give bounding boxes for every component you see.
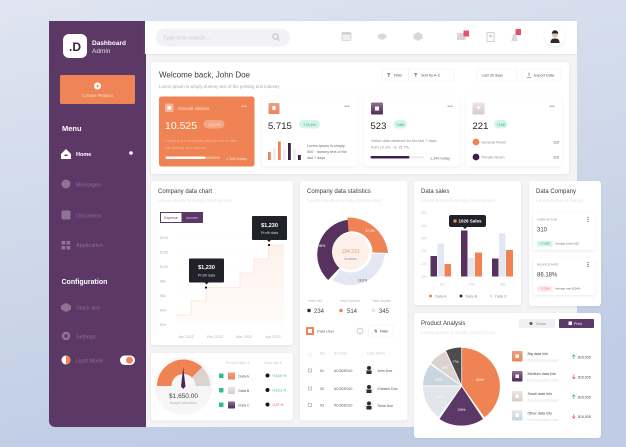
panel: product analysis bbox=[414, 313, 601, 438]
legend: Data B bbox=[466, 294, 478, 298]
donut chart: 194,231 bbox=[341, 249, 360, 255]
table: users: #CODE010 bbox=[334, 404, 352, 408]
card: overall visitors: the printing and industry bbox=[166, 146, 206, 150]
card: user active: 310 bbox=[537, 228, 548, 234]
card: overall visitors: Lorem Ipsum is simply dummy text of data bbox=[166, 139, 237, 143]
card: stat 5.715: 5.715 bbox=[268, 121, 292, 132]
nav: home bbox=[61, 149, 133, 159]
table: products: Data C bbox=[238, 404, 250, 408]
pie labels: 8% bbox=[442, 365, 448, 370]
card: stat 523: 523 bbox=[370, 121, 386, 132]
heading: Data sales bbox=[421, 189, 449, 195]
card: stat 221: 110 bbox=[553, 140, 559, 144]
card: stat 221: +165 bbox=[497, 123, 505, 127]
list: medium data: $15,535 bbox=[578, 376, 591, 380]
search box bbox=[156, 28, 290, 46]
pie labels: 20% bbox=[457, 407, 466, 412]
card: overall visitors: 1,340 today bbox=[226, 156, 247, 161]
table toolbar: Filter bbox=[380, 330, 389, 334]
logo tile: .D bbox=[69, 40, 81, 54]
card: stat 5.715 bbox=[262, 96, 358, 166]
card: user active: Average Users 525 bbox=[555, 242, 579, 246]
card: stat 5.715: last 7 days bbox=[307, 156, 325, 160]
list: medium data bbox=[512, 371, 591, 382]
legend: Data A bbox=[435, 294, 447, 298]
grouped bar chart: 100 bbox=[421, 262, 427, 266]
logo tile bbox=[63, 34, 87, 58]
card: overall visitors: Overall visitors bbox=[178, 106, 210, 112]
table: users: No bbox=[320, 352, 325, 356]
step area chart: $2k bbox=[160, 323, 166, 327]
card: stat 221: General Room bbox=[482, 140, 506, 144]
table: products: Sales rate ▾ bbox=[264, 361, 282, 365]
grouped bar chart bbox=[421, 211, 513, 286]
panel: data company bbox=[529, 181, 601, 306]
card: stat 5.715: +13,4% bbox=[303, 123, 317, 127]
step area chart: $15k bbox=[160, 250, 168, 254]
step area chart: Mar 2022 bbox=[236, 335, 252, 339]
table: products: -0,07 % bbox=[272, 403, 283, 407]
step area chart: $20k bbox=[160, 236, 168, 240]
card: bounce rate: 86.18% bbox=[537, 272, 558, 278]
list: small data bbox=[512, 391, 591, 402]
donut totals: Total Overdue bbox=[340, 299, 360, 303]
list: big data: $15,535 bbox=[578, 356, 591, 360]
table: users: Chelalin Doe bbox=[377, 387, 398, 391]
card: bounce rate bbox=[533, 258, 595, 295]
subtitle: Lorem Ipsum is simply dummy text bbox=[158, 198, 233, 204]
button: share: Share bbox=[536, 322, 546, 326]
subtitle: Lorem Ipsum is simply dummy text of the printing and industry bbox=[159, 84, 280, 89]
card: stat 221: 221 bbox=[472, 121, 488, 132]
card: stat 221: Private Room bbox=[482, 156, 505, 160]
donut totals: 345 bbox=[379, 309, 390, 315]
panel: sidebar bbox=[49, 21, 146, 427]
button: share bbox=[519, 319, 555, 328]
grouped bar chart: Mar bbox=[500, 282, 507, 286]
donut totals: 234 bbox=[314, 309, 325, 315]
panel: company data chart bbox=[151, 181, 293, 345]
donut totals: Total Unpaid bbox=[372, 299, 390, 303]
panel: company data statistics bbox=[300, 181, 408, 420]
toggle: expense / income: Income bbox=[186, 216, 198, 220]
card: stat 523: ••• bbox=[447, 104, 453, 110]
table: users: 03 bbox=[320, 404, 324, 408]
list: medium data: Put description here bbox=[528, 378, 559, 382]
nav: application bbox=[62, 241, 103, 250]
gauge: Budget Allocation bbox=[170, 401, 197, 405]
list: small data: Small data info bbox=[528, 392, 552, 396]
heading: Product Analysis bbox=[421, 321, 465, 327]
button: print: Print bbox=[574, 322, 583, 326]
card: bounce rate: BOUNCE RATE bbox=[537, 262, 558, 266]
table: users: #CODE010 bbox=[334, 369, 352, 373]
table: users: 02 bbox=[320, 387, 324, 391]
table: users: ID Code bbox=[334, 352, 347, 356]
table toolbar: Data User bbox=[317, 330, 335, 334]
donut chart: Invoices bbox=[344, 257, 357, 261]
card: stat 221: ••• bbox=[549, 104, 555, 110]
grouped bar chart: Feb bbox=[469, 282, 475, 286]
card: stat 5.715: ••• bbox=[344, 104, 350, 110]
button: create project bbox=[60, 75, 135, 104]
table: products: +15,00 % bbox=[272, 374, 286, 378]
donut totals bbox=[307, 299, 390, 315]
nav: document: Document bbox=[76, 214, 102, 220]
card: user active bbox=[533, 213, 595, 250]
panel: top bar bbox=[145, 21, 577, 54]
list: other data: $15,535 bbox=[578, 415, 591, 419]
card: stat 5.715: Lorem Ipsum is simply bbox=[307, 144, 345, 148]
tooltip: profit left: Profit data bbox=[198, 274, 216, 278]
subtitle: Lorem Ipsum is simply dummy text bbox=[421, 198, 496, 204]
tooltip: profit right: Profit data bbox=[261, 231, 279, 235]
list: big data: Put description here bbox=[528, 358, 559, 362]
nav: messages: Messages bbox=[76, 182, 101, 188]
grouped bar chart: Jan bbox=[439, 282, 445, 286]
nav: stack dev: Stack dev bbox=[76, 306, 100, 312]
table: products: Data B bbox=[238, 389, 250, 393]
card: stat 523: +165 bbox=[396, 123, 404, 127]
main background panel bbox=[145, 21, 577, 427]
pie labels: 40% bbox=[476, 377, 484, 382]
step area chart: $8k bbox=[160, 280, 166, 284]
card: user active: + 4.06% bbox=[540, 242, 550, 246]
filter controls bbox=[382, 69, 561, 81]
grouped bar chart: 300 bbox=[421, 236, 427, 240]
table: products: +15,01 % bbox=[272, 388, 286, 392]
card: overall visitors: ••• bbox=[241, 104, 247, 110]
card: stat 5.715: 500 · dummy text of the bbox=[307, 150, 347, 154]
list: medium data: Medium data info bbox=[528, 372, 556, 376]
heading: Welcome back, John Doe bbox=[159, 70, 251, 80]
heading: Company data chart bbox=[158, 189, 212, 195]
table: users: John Doe bbox=[377, 369, 392, 373]
card: overall visitors: +15,2% bbox=[208, 123, 221, 127]
filter controls: Sort by A-Z bbox=[421, 74, 441, 78]
donut totals: 514 bbox=[347, 309, 358, 315]
table toolbar: ⇅ bbox=[374, 330, 378, 334]
tooltip: profit right bbox=[252, 216, 287, 246]
nav: home: Home bbox=[76, 152, 91, 158]
pie labels: 15% bbox=[435, 394, 444, 399]
donut chart: 37,4% bbox=[365, 229, 375, 233]
nav: light mode: Light Mode bbox=[76, 358, 103, 364]
list: other data: Put description here bbox=[528, 418, 559, 422]
button: print bbox=[559, 319, 594, 328]
table: users: 01 bbox=[320, 369, 324, 373]
filter controls: Last 30 days bbox=[482, 74, 503, 78]
step area chart: Jan 2022 bbox=[178, 335, 194, 339]
pie labels bbox=[434, 359, 484, 412]
table toolbar bbox=[306, 325, 394, 337]
subtitle: Lorem Ipsum is simply bbox=[536, 198, 584, 204]
donut chart bbox=[317, 217, 388, 285]
table: users: User Name bbox=[367, 352, 385, 356]
subtitle: Lorem Ipsum is simply dummy text bbox=[421, 330, 496, 336]
grouped bar chart: 400 bbox=[421, 224, 427, 228]
card: stat 523: Visitor data obtained for the last 7 days bbox=[371, 139, 437, 143]
avatar bbox=[545, 26, 565, 46]
nav: messages bbox=[62, 180, 101, 188]
tooltip: profit right: $1,230 bbox=[261, 223, 278, 229]
card: stat 523: from 10.2% · to 15.7%. bbox=[371, 146, 410, 150]
card: bounce rate: Average rate 8254% bbox=[555, 287, 581, 291]
subtitle: Lorem Ipsum is simply dummy text bbox=[307, 198, 382, 204]
pie chart bbox=[423, 347, 500, 426]
tooltip: profit left: $1,230 bbox=[198, 265, 215, 271]
step area chart: Apr 2022 bbox=[265, 335, 281, 339]
table: products: Product Name ▾ bbox=[226, 361, 250, 365]
card: user active: USER ACTIVE bbox=[537, 218, 557, 222]
card: stat 523: 1,340 today bbox=[430, 156, 450, 160]
card: overall visitors: 10.525 bbox=[165, 120, 197, 132]
gauge: $1,650.00 bbox=[169, 393, 198, 400]
heading: Data Company bbox=[536, 189, 576, 195]
step area chart: $6k bbox=[160, 294, 166, 298]
nav: settings: Settings bbox=[76, 334, 96, 340]
donut chart: 18,6% bbox=[358, 278, 367, 282]
list: big data: Big data info bbox=[528, 352, 548, 356]
table: products bbox=[219, 361, 286, 408]
heading: menu: Menu bbox=[62, 124, 82, 133]
panel: budget gauge bbox=[151, 353, 293, 420]
card: overall visitors bbox=[159, 96, 254, 166]
grouped bar chart: 500 bbox=[421, 211, 427, 215]
list: big data bbox=[512, 351, 591, 362]
tooltip: profit left bbox=[189, 258, 224, 289]
panel: data sales bbox=[414, 181, 521, 305]
step area chart bbox=[160, 236, 284, 339]
step area chart: $10k bbox=[160, 265, 168, 269]
pie labels: 10% bbox=[434, 377, 443, 382]
gauge bbox=[154, 357, 212, 415]
card: stat 221: 110 bbox=[553, 156, 559, 160]
card: stat 221 bbox=[466, 96, 562, 166]
donut chart: 45% bbox=[319, 244, 325, 248]
nav: light mode bbox=[62, 356, 135, 365]
nav: stack dev bbox=[61, 303, 100, 312]
brand name bbox=[92, 40, 126, 55]
brand name: Admin bbox=[92, 48, 111, 55]
pie labels: 7% bbox=[453, 359, 459, 364]
step area chart: $4k bbox=[160, 308, 166, 312]
filter controls: Filter bbox=[394, 74, 403, 78]
button: create project: Create Project bbox=[82, 93, 113, 99]
donut totals: Total Paid bbox=[308, 299, 322, 303]
card: stat 523 bbox=[364, 96, 460, 166]
grouped bar chart: 000 bbox=[421, 275, 427, 279]
legend: Data C bbox=[495, 294, 507, 298]
table: users: #CODE010 bbox=[334, 387, 352, 391]
tooltip: sales: 1026 Sales bbox=[458, 219, 482, 224]
table: products: Data A bbox=[238, 374, 250, 378]
table: users bbox=[308, 352, 398, 410]
list: small data: Put description here bbox=[528, 398, 559, 402]
search box: Type in to search ... bbox=[163, 36, 211, 42]
heading: configuration: Configuration bbox=[62, 279, 107, 286]
list: other data: Other data info bbox=[528, 412, 552, 416]
panel: welcome bbox=[151, 62, 569, 174]
heading: Company data statistics bbox=[307, 189, 371, 195]
mini bar chart bbox=[268, 142, 301, 160]
nav: document bbox=[62, 210, 102, 220]
nav: application: Application bbox=[76, 243, 103, 249]
list: small data: $15,535 bbox=[578, 396, 591, 400]
toggle: expense / income: Expense bbox=[164, 216, 178, 220]
toggle: expense / income bbox=[160, 212, 203, 223]
list: other data bbox=[512, 410, 591, 422]
nav: settings bbox=[63, 333, 96, 340]
step area chart: Feb 2022 bbox=[207, 335, 223, 339]
table: users: Tania Doe bbox=[377, 404, 393, 408]
card: bounce rate: - 0.31% bbox=[540, 287, 550, 291]
filter controls: Export Data bbox=[534, 74, 555, 78]
brand name: Dashboard bbox=[92, 40, 126, 47]
grouped bar chart: 200 bbox=[421, 249, 427, 253]
toolbar icons bbox=[342, 29, 521, 42]
legend bbox=[429, 294, 507, 298]
